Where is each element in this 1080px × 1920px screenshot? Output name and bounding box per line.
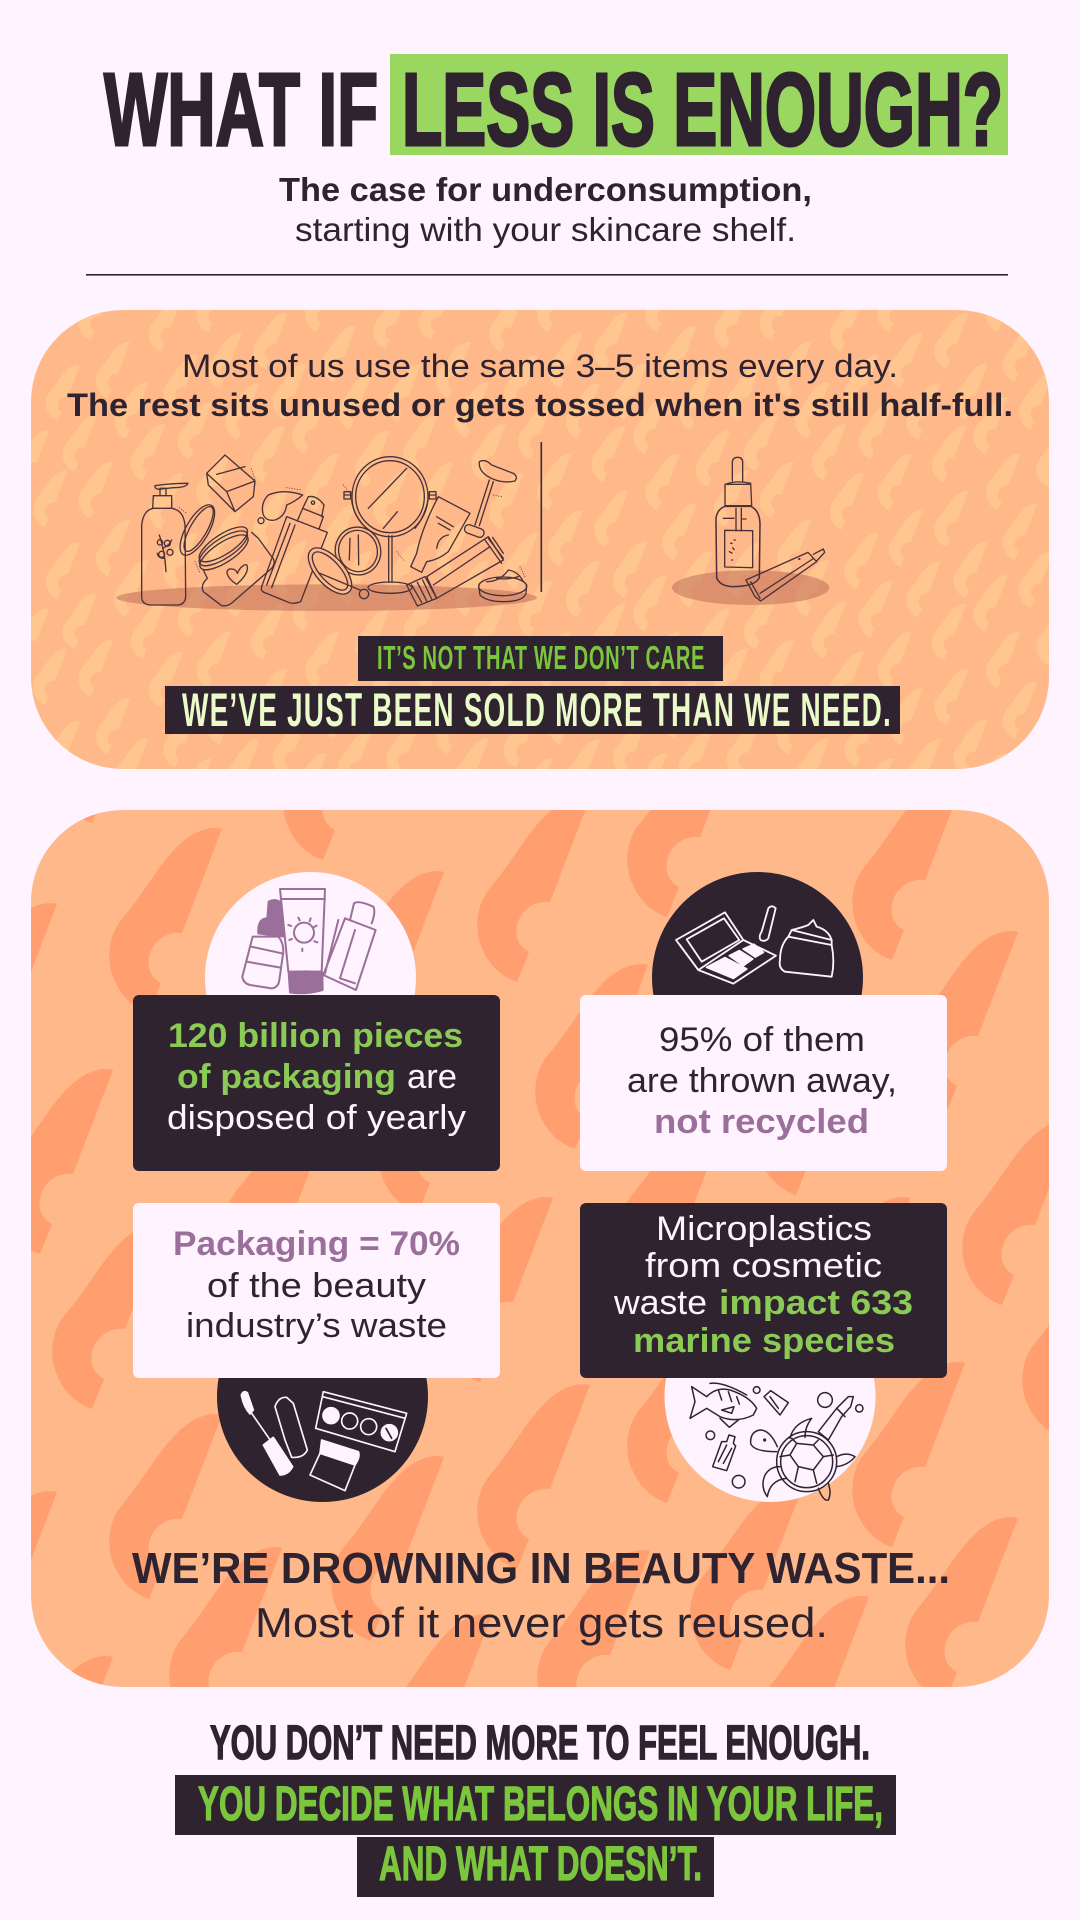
card: microplastics: marine species — [633, 1322, 895, 1360]
closing statement — [175, 1717, 896, 1897]
card: 95 percent: not recycled — [654, 1103, 869, 1141]
card: microplastics: from cosmetic — [645, 1247, 882, 1285]
callout: not that we don't care: IT’S NOT THAT WE DON’T CARE — [377, 639, 705, 676]
card: packaging 70 percent: industry’s waste — [186, 1307, 447, 1345]
title: WHAT IF — [104, 52, 378, 167]
panel conclusion text — [132, 1544, 950, 1646]
panel: unused products — [31, 310, 1049, 769]
icon: mascara, tube, palette and jar on dark circle — [217, 1291, 428, 1502]
icon: fish, turtle and plastic waste on light circle — [664, 1291, 876, 1502]
illustration: pile of many beauty products — [116, 455, 537, 611]
panel conclusion text: Most of it never gets reused. — [255, 1599, 828, 1646]
intro text: The rest sits unused or gets tossed when it's still half-full. — [67, 387, 1013, 423]
card: 95 percent: 95% of them — [659, 1021, 865, 1059]
subtitle: starting with your skincare shelf. — [295, 211, 796, 248]
callout: not that we don't care — [358, 636, 723, 681]
intro text — [67, 348, 1013, 423]
card: microplastics — [580, 1203, 947, 1378]
panel conclusion text: WE’RE DROWNING IN BEAUTY WASTE... — [132, 1544, 950, 1593]
card: 95 percent: are thrown away, — [627, 1062, 897, 1100]
card: 95 percent — [580, 995, 947, 1171]
card: 120 billion pieces — [133, 995, 500, 1171]
intro text: Most of us use the same 3–5 items every day. — [182, 348, 898, 384]
icon: open palette and jar on dark circle — [652, 872, 863, 1083]
icon: skincare bottles on light circle — [205, 872, 416, 1083]
panel: beauty waste — [31, 810, 1049, 1687]
card: packaging 70 percent: Packaging = 70% — [173, 1225, 460, 1263]
card: packaging 70 percent: of the beauty — [207, 1267, 426, 1305]
card: packaging 70 percent — [133, 1203, 500, 1378]
card: microplastics: Microplastics — [656, 1210, 872, 1248]
card: microplastics: waste — [613, 1284, 707, 1322]
card: microplastics: impact 633 — [719, 1284, 913, 1322]
card: 120 billion pieces: disposed of yearly — [167, 1099, 466, 1137]
card: 120 billion pieces: are — [407, 1058, 457, 1096]
illustration: minimal two products — [672, 457, 829, 605]
card: 120 billion pieces: of packaging — [177, 1058, 396, 1096]
title — [104, 52, 1008, 167]
subtitle: The case for underconsumption, — [279, 171, 812, 208]
card: 120 billion pieces: 120 billion pieces — [168, 1017, 463, 1055]
subtitle — [279, 171, 812, 248]
closing statement: AND WHAT DOESN’T. — [379, 1838, 702, 1891]
